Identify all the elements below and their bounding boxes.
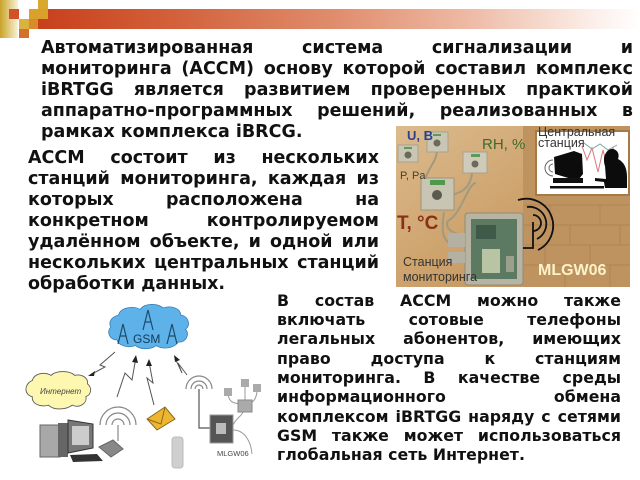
monitoring stations text block: нескольких центральных станций bbox=[28, 253, 379, 273]
intro text block: мониторинга (АССМ) основу которой составил комплекс bbox=[41, 59, 633, 79]
sensor boxes and cables bbox=[398, 132, 487, 244]
sensor labels: P, Pa bbox=[400, 170, 426, 182]
header gradient bar bbox=[38, 9, 640, 29]
intro text block: рамках комплекса iBRCG. bbox=[41, 122, 303, 142]
intro text block bbox=[41, 38, 633, 142]
operator silhouette bbox=[595, 149, 627, 188]
signal waves bbox=[545, 160, 553, 176]
composition text block: включать сотовые телефоны bbox=[277, 310, 621, 329]
Internet cloud: Интернет bbox=[40, 387, 81, 396]
decorative corner squares bbox=[0, 0, 48, 38]
network diagram bbox=[26, 304, 261, 468]
sensor labels: RH, % bbox=[482, 136, 525, 153]
desktop computer bbox=[40, 420, 123, 462]
intro text block: iBRTGG является развитием проверенных практикой bbox=[41, 80, 633, 100]
composition text block: информационного обмена bbox=[277, 387, 621, 406]
monitoring stations text block bbox=[28, 148, 379, 294]
small sensors and device bbox=[210, 379, 261, 458]
sensor labels: Станция bbox=[403, 255, 452, 269]
envelope bbox=[147, 407, 175, 430]
antenna signal arcs bbox=[518, 199, 553, 250]
small sensors and device: MLGW06 bbox=[217, 449, 249, 458]
monitoring stations text block: удалённом объекте, и одной или bbox=[28, 232, 379, 252]
sensor labels: U, B bbox=[407, 128, 433, 143]
composition text block: легальных абонентов, имеющих bbox=[277, 329, 621, 348]
monitoring stations text block: станций мониторинга, каждая из bbox=[28, 169, 379, 189]
composition text block: В состав АССМ можно также bbox=[277, 291, 621, 310]
monitoring station photo illustration bbox=[396, 126, 630, 287]
sensor labels: T, °C bbox=[397, 213, 439, 234]
central station panel: станция bbox=[538, 136, 585, 150]
monitor silhouette bbox=[554, 151, 583, 180]
central station panel bbox=[536, 125, 629, 195]
monitoring stations text block: обработки данных. bbox=[28, 274, 225, 294]
composition text block: комплексом iBRTGG наряду с сетями bbox=[277, 407, 621, 426]
monitoring stations text block: которых расположена на bbox=[28, 190, 379, 210]
monitoring stations text block: АССМ состоит из нескольких bbox=[28, 148, 379, 168]
composition text block: право доступа к станциям bbox=[277, 349, 621, 368]
GSM cloud: GSM bbox=[133, 332, 160, 346]
composition text block: глобальная сеть Интернет. bbox=[277, 445, 525, 464]
composition text block: мониторинга. В качестве среды bbox=[277, 368, 621, 387]
phone bbox=[172, 437, 183, 468]
lightning arrows bbox=[90, 352, 187, 405]
MLGW06 device bbox=[448, 213, 523, 285]
sensor labels: MLGW06 bbox=[538, 262, 607, 279]
GSM cloud bbox=[109, 304, 188, 349]
Internet cloud bbox=[26, 372, 91, 409]
composition text block: GSM также может использоваться bbox=[277, 426, 621, 445]
composition text block bbox=[277, 291, 621, 464]
wireless arcs bbox=[100, 376, 212, 441]
sensor labels: мониторинга bbox=[403, 270, 477, 284]
sensor labels bbox=[397, 128, 607, 284]
monitoring stations text block: конкретном контролируемом bbox=[28, 211, 379, 231]
intro text block: аппаратно-программных решений, реализованных в bbox=[41, 101, 633, 121]
intro text block: Автоматизированная система сигнализации и bbox=[41, 38, 633, 58]
